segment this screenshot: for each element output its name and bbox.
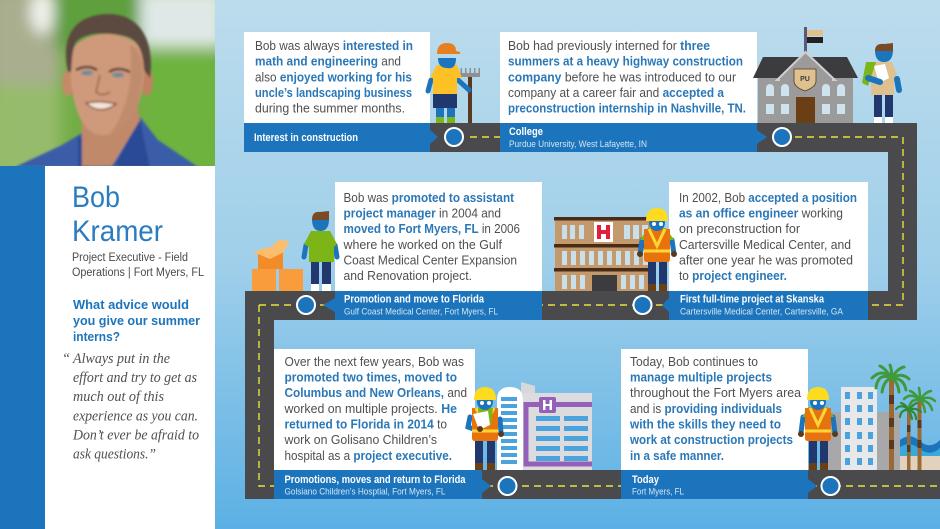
panel: promotions, moves and return to Florida: Promotions, moves and return to Florida xyxy=(284,474,466,486)
panel: promotion and move to Florida xyxy=(323,182,542,320)
panel: college: Purdue University, West Lafayette, IN xyxy=(509,139,647,150)
portrait photo of Bob Kramer xyxy=(0,0,225,175)
panel: promotion and move to Florida: Gulf Coast Medical Center, Fort Myers, FL xyxy=(344,306,498,318)
panel: interest in construction: Bob was always interested in xyxy=(255,38,413,53)
panel: interest in construction: during the summer months. xyxy=(255,101,405,116)
timeline markers xyxy=(297,128,840,495)
panel: promotions, moves and return to Florida: promoted two times, moved to xyxy=(284,370,457,384)
question heading: you give our summer xyxy=(73,313,200,328)
icon: site manager in safety vest xyxy=(798,387,838,470)
panel: promotions, moves and return to Florida: hospital as a project executive. xyxy=(284,448,452,463)
panel: promotions, moves and return to Florida: Over the next few years, Bob was xyxy=(284,354,464,369)
icon: college building xyxy=(753,27,858,123)
question heading xyxy=(73,297,200,344)
panel: college: company before he was introduced to our xyxy=(508,69,737,84)
panel: today: and is providing individuals xyxy=(630,401,782,416)
panel: first full-time project: as an office engineer working xyxy=(679,206,843,220)
panel: today: manage multiple projects xyxy=(630,370,772,384)
icon: college building: PU xyxy=(800,76,810,83)
quote: Always put in the xyxy=(72,351,171,367)
panel: interest in construction: uncle’s landscaping business xyxy=(255,85,412,100)
panel: promotion and move to Florida: project manager in 2004 and xyxy=(344,206,501,220)
name: Kramer xyxy=(72,215,163,248)
quote xyxy=(62,351,199,462)
panel: first full-time project: after one year he was promoted xyxy=(679,252,853,268)
job title: Project Executive - Field xyxy=(72,252,188,264)
panel: first full-time project: In 2002, Bob accepted a position xyxy=(679,190,857,205)
icon: worker holding plans xyxy=(468,387,504,470)
job title xyxy=(72,252,205,279)
panel: promotions, moves and return to Florida: returned to Florida in 2014 to xyxy=(284,416,447,432)
panel: promotions, moves and return to Florida: Columbus and New Orleans, and xyxy=(284,385,467,400)
question heading: interns? xyxy=(73,329,120,344)
panel: promotions, moves and return to Florida: worked on multiple projects. He xyxy=(284,401,457,416)
panel: promotion and move to Florida: Bob was promoted to assistant xyxy=(344,190,515,205)
icon: student with notebook xyxy=(862,43,899,123)
panel: promotions, moves and return to Florida: work on Golisano Children’s xyxy=(284,432,437,447)
panel: first full-time project: First full-time project at Skanska xyxy=(680,294,825,306)
panel: college: Bob had previously interned for three xyxy=(508,38,710,53)
panel: today: throughout the Fort Myers area xyxy=(630,385,802,400)
panel: college: summers at a heavy highway construction xyxy=(508,54,743,69)
panel: today: Fort Myers, FL xyxy=(632,486,684,498)
panel: today: Today, Bob continues to xyxy=(630,354,758,369)
panel: first full-time project: on preconstruction for xyxy=(679,221,801,236)
panel: interest in construction: Interest in construction xyxy=(254,132,358,144)
panel: promotion and move to Florida: moved to Fort Myers, FL in 2006 xyxy=(344,221,520,236)
panel: promotion and move to Florida: Coast Medical Center Expansion xyxy=(344,252,517,268)
job title: Operations | Fort Myers, FL xyxy=(72,267,205,279)
icon: man in green shirt xyxy=(304,211,337,291)
profile panel xyxy=(45,166,215,529)
panel: college: company at a career fair and accepted a xyxy=(508,85,725,100)
icon: Fort Myers skyline with palms xyxy=(828,365,940,470)
panel: promotions, moves and return to Florida xyxy=(274,349,491,499)
panel: first full-time project xyxy=(662,182,868,320)
panel: promotion and move to Florida: where he worked on the Gulf xyxy=(343,237,502,252)
panel: promotion and move to Florida: and Renovation project. xyxy=(344,268,472,283)
quote: effort and try to get as xyxy=(73,370,197,386)
panel: today xyxy=(621,349,817,499)
question heading: What advice would xyxy=(73,297,189,312)
panel: interest in construction: math and engineering and xyxy=(255,54,401,69)
name: Bob xyxy=(72,181,120,214)
quote: experience as you can. xyxy=(73,408,198,424)
icon: Golisano Children's Hospital xyxy=(497,382,592,470)
panel: first full-time project: Cartersville Medical Center, Cartersville, GA xyxy=(680,306,844,318)
icon: Cartersville Medical Center building xyxy=(554,217,650,291)
panel: college xyxy=(500,32,767,152)
blue side band xyxy=(0,166,45,529)
icon: engineer in safety vest xyxy=(637,208,677,291)
quote: much out of this xyxy=(73,389,164,405)
icon: moving boxes xyxy=(252,240,303,291)
quote: Don’t ever be afraid to xyxy=(72,428,199,444)
panel: first full-time project: Cartersville Medical Center, and xyxy=(679,237,851,252)
quote: ask questions.” xyxy=(73,446,156,462)
icon: worker with rake xyxy=(428,43,480,123)
panel: today: with the skills they need to xyxy=(629,416,781,432)
panel: first full-time project: to project engineer. xyxy=(679,268,787,283)
panel: promotion and move to Florida: Promotion and move to Florida xyxy=(344,294,485,306)
panel: today: Today xyxy=(632,474,660,486)
background sky xyxy=(215,0,940,529)
panel: today: work at construction projects xyxy=(629,432,793,447)
quote: “ xyxy=(62,351,70,367)
name xyxy=(72,181,163,248)
panel: college: College xyxy=(509,126,543,138)
panel: today: in a safe manner. xyxy=(630,448,724,463)
road path xyxy=(245,123,940,499)
panel: interest in construction: also enjoyed working for his xyxy=(255,69,412,84)
panel: interest in construction xyxy=(244,32,438,152)
panel: promotions, moves and return to Florida: Golsiano Children’s Hosptial, Fort Myers, FL xyxy=(284,486,446,498)
panel: college: preconstruction internship in Nashville, TN. xyxy=(508,101,746,116)
